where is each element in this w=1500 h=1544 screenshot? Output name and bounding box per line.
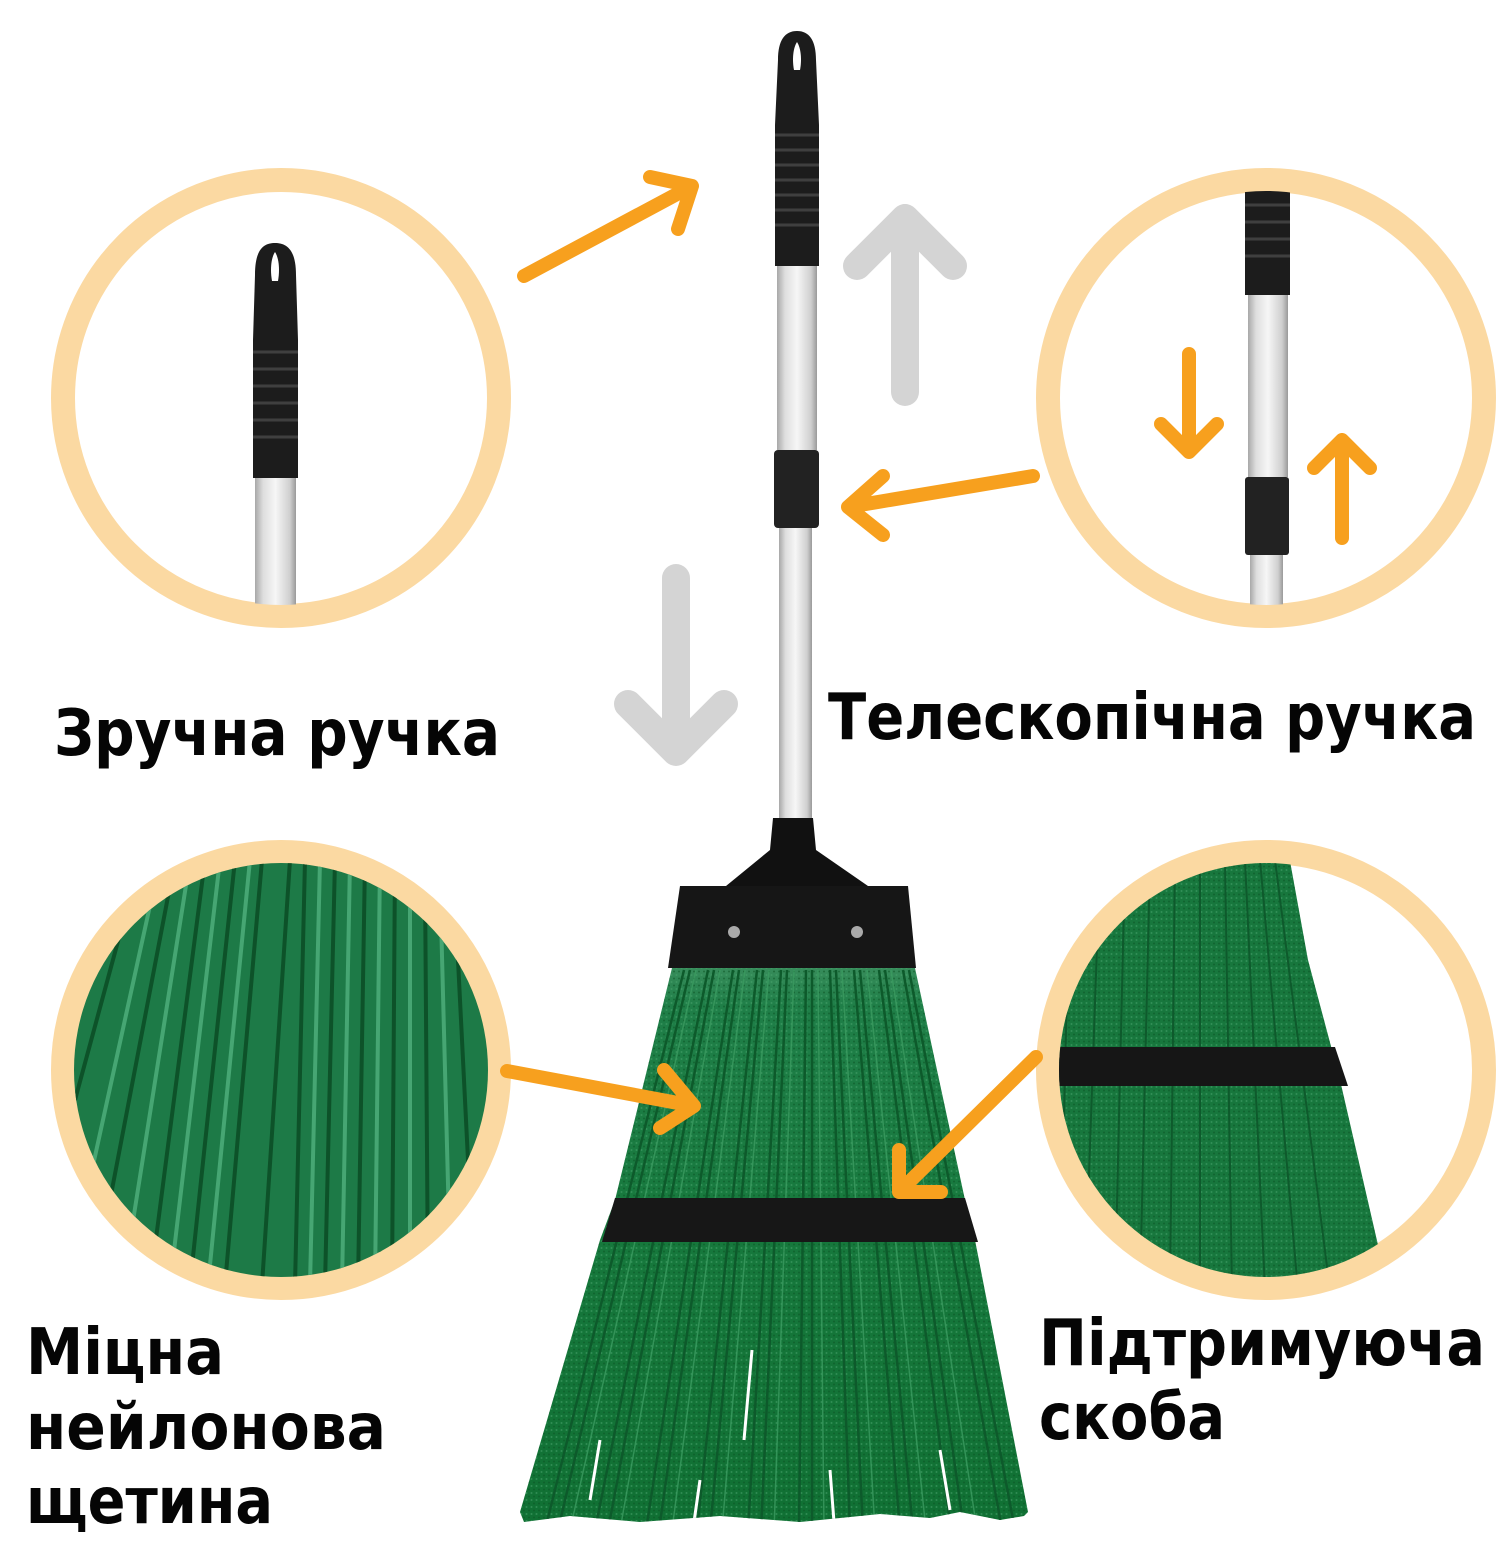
arrow: strap callout to strap	[899, 1057, 1036, 1192]
broom bristles	[520, 968, 1028, 1522]
callout circle: nylon bristles	[60, 850, 500, 1290]
label: nylon bristles: нейлонова	[26, 1391, 386, 1465]
label: nylon bristles	[26, 1316, 386, 1539]
callout circle: comfortable handle	[63, 180, 499, 618]
broom illustration	[500, 31, 1050, 1530]
arrow: telescopic callout to collar	[848, 476, 1033, 535]
broom handle upper tube	[777, 266, 817, 450]
grey arrow: extend up	[857, 218, 953, 392]
arrow: bristle callout to bristles	[507, 1070, 694, 1128]
label: support strap: скоба	[1039, 1381, 1225, 1455]
broom handle lower tube	[779, 528, 812, 820]
label: nylon bristles: щетина	[26, 1465, 273, 1539]
callout circle: support strap	[1040, 850, 1484, 1300]
broom support strap	[602, 1198, 978, 1242]
callout circle: telescopic handle	[1048, 180, 1484, 616]
label: comfortable handle: Зручна ручка	[54, 697, 500, 771]
broom head bracket	[668, 818, 916, 968]
broom handle grip	[775, 31, 819, 266]
small arrow down	[1161, 354, 1217, 452]
small arrow up	[1314, 440, 1370, 538]
arrow: grip callout to handle	[524, 177, 692, 276]
label: support strap	[1039, 1307, 1485, 1455]
broom handle collar	[774, 450, 819, 528]
label: nylon bristles: Міцна	[26, 1316, 224, 1390]
grey arrow: extend down	[628, 578, 724, 752]
